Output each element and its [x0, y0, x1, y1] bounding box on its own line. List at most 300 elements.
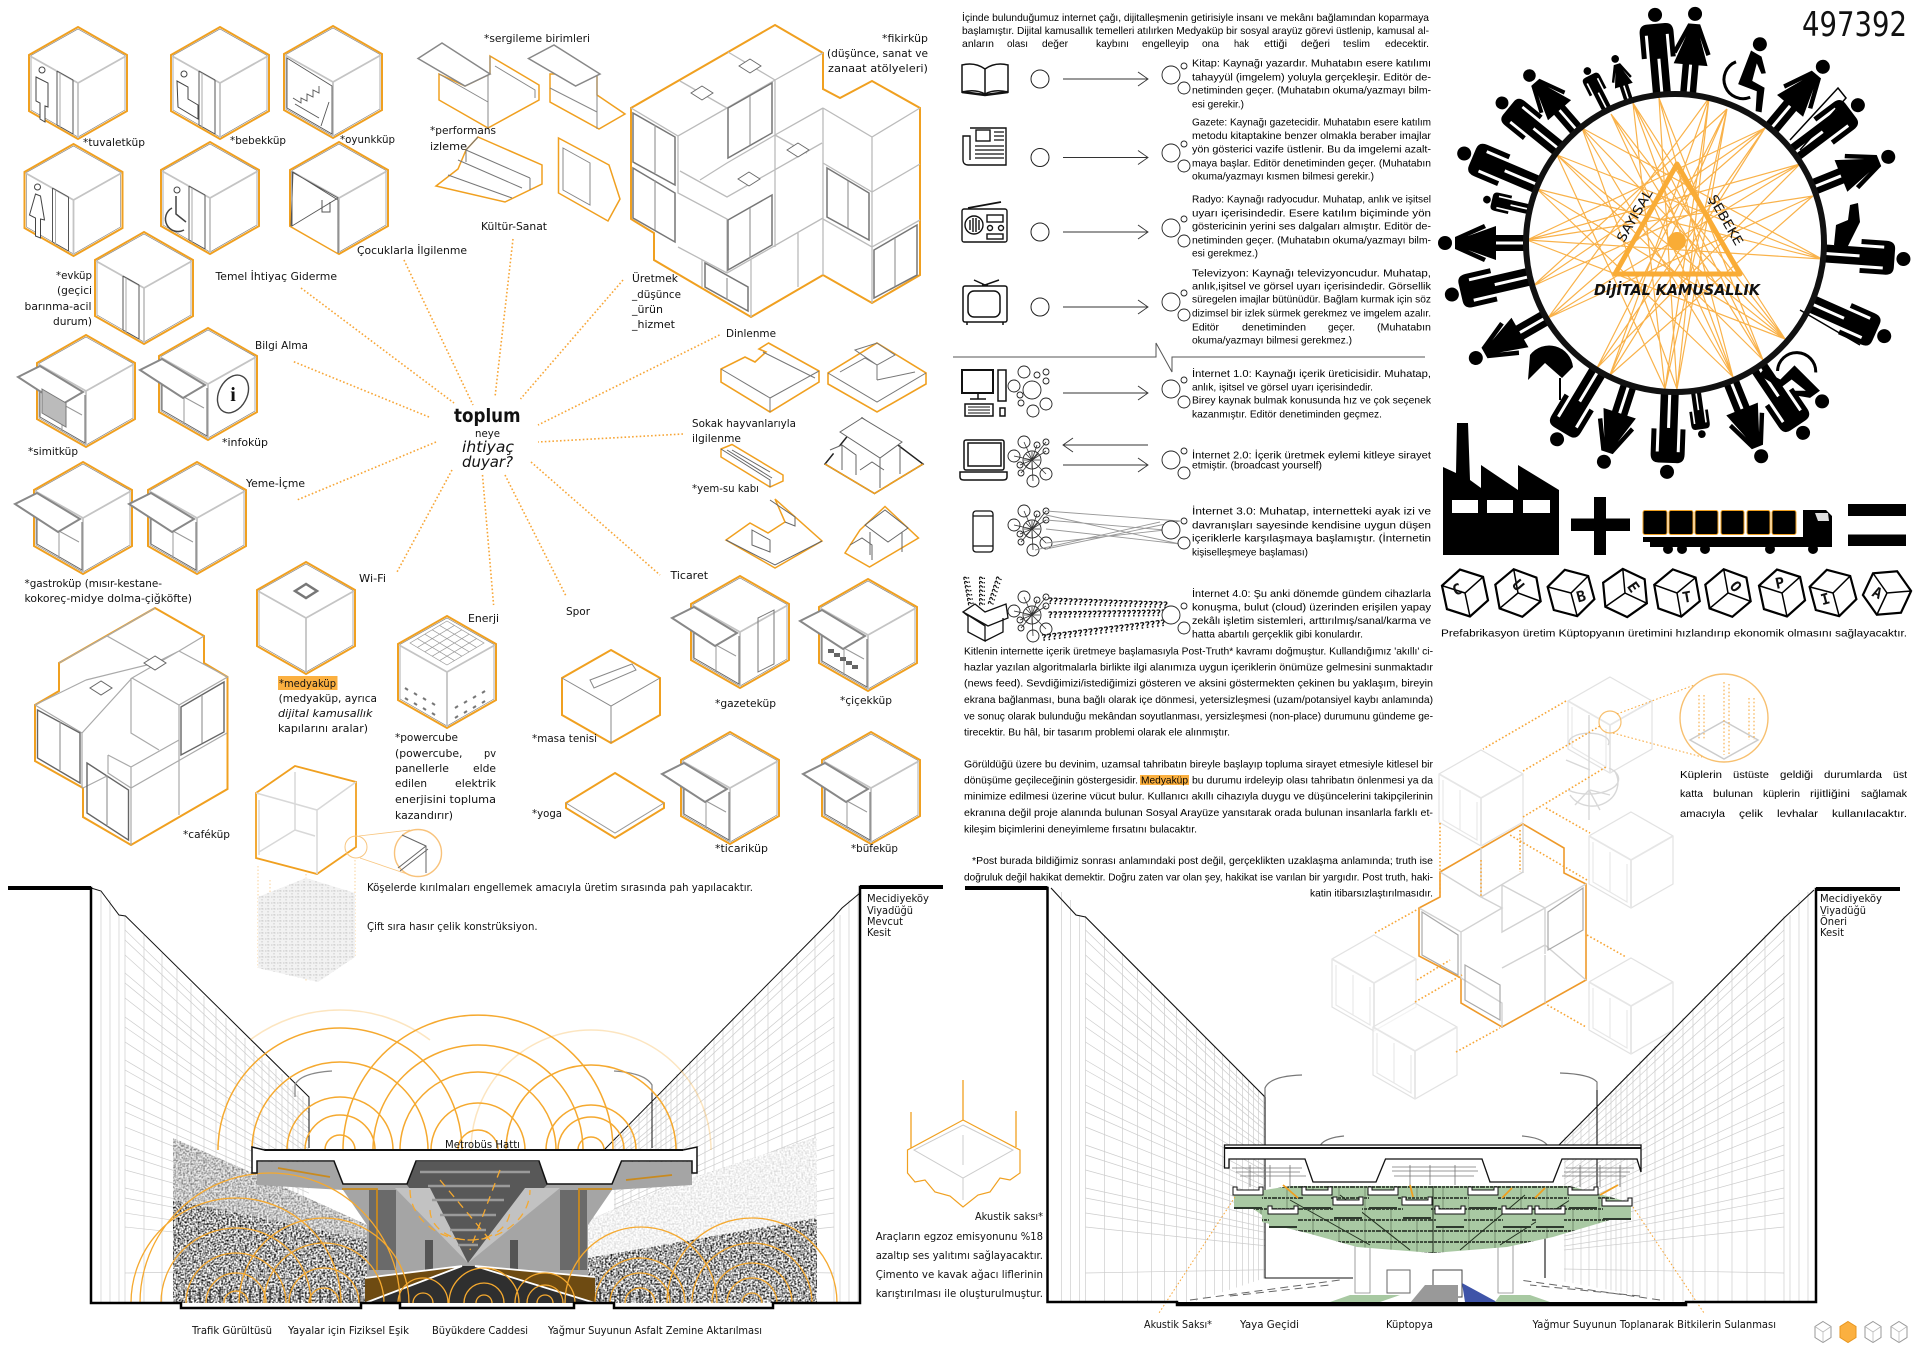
label: [692, 417, 796, 445]
icon: plus: [1571, 497, 1630, 555]
row: television flow: [1031, 290, 1190, 321]
icon: infoküp: [140, 328, 257, 440]
label: *fikirküp: [882, 32, 928, 45]
labels: section 1 captions: Yağmur Suyunun Asfalt Zemine Aktarılması: [547, 1324, 762, 1337]
text block: intro: edecektir.: [1385, 38, 1429, 50]
hanging cables and lattice: [1232, 1165, 1634, 1187]
text: Kitap: esi gerekir.): [1192, 98, 1244, 110]
text: Televizyon: okuma/yazmayı bilmesi gerekmez.): [1192, 334, 1352, 346]
icon: infoküp: i: [230, 384, 236, 406]
label: section title: Mevcut: [867, 915, 904, 928]
columns and kiosk: [1190, 1235, 1660, 1303]
text block: intro: olası: [1007, 38, 1028, 50]
heading: CUBETOPIA letter cubes: I: [1819, 589, 1832, 609]
spiral stair: [1566, 715, 1619, 820]
text block: steel plates note: üst: [1893, 769, 1907, 781]
orange assembled cubes: [1419, 824, 1586, 1027]
street lamps: [295, 1071, 652, 1097]
text: Kitap: Kitap: Kaynağı yazardır. Muhatabın esere katılımı: [1192, 58, 1431, 70]
icon: sergileme units: [418, 43, 625, 129]
label: medyaküp description: dijital kamusallık: [278, 707, 373, 720]
text block: acoustic planter: Araçların egzoz emisyonunu %18: [876, 1230, 1043, 1243]
text: Radyo: uyarı içerisindedir. Esere katılım biçiminde yön: [1192, 208, 1431, 220]
chart: orange network web: [1527, 98, 1822, 389]
text block: footnote: *Post burada bildiğimiz sonrası anlamındaki post değil, gerçeklikten uzaklaşma anlamında; truth ise: [972, 855, 1433, 867]
building outline: [91, 888, 860, 1150]
label: [430, 124, 496, 153]
text: Televizyon: (Muhatabın: [1377, 322, 1431, 334]
heading: CUBETOPIA letter cubes: U: [1508, 576, 1528, 594]
row: internet 2.0 flow: [1063, 438, 1190, 479]
text: İnternet 4.0: hatta abartılı gerçeklik gibi konulardır.: [1192, 628, 1363, 640]
labels: section 2 captions: Akustik Saksı*: [1144, 1318, 1212, 1331]
heading: toplum neye ihtiyaç duyar?: [454, 405, 520, 471]
label: *çiçekküp: [840, 694, 892, 707]
text block: steel plates note: üstüste: [1733, 769, 1769, 781]
text block: intro: değeri: [1301, 38, 1330, 50]
label: *büfeküp: [851, 842, 898, 855]
label: Çocuklarla İlgilenme: [357, 244, 467, 257]
text: İnternet 3.0: içeriklerle karşılaşmaya başlamıştır. (İnternetin: [1192, 532, 1431, 544]
label: Enerji: [468, 612, 499, 625]
icon: evküp: [95, 232, 193, 344]
text block: post-truth: (news feed). Sevdiğimizi/istediğimizi gösteren ve aksini göstermekten çekinen bu yaklaşım, bireyin: [964, 678, 1433, 690]
text block: acoustic planter: azaltıp ses yalıtımı sağlayacaktır.: [876, 1249, 1043, 1262]
text: İnternet 1.0: [1192, 367, 1432, 420]
text: Gazete: Gazete: Kaynağı gazetecidir. Muhatabın esere katılım: [1192, 116, 1431, 128]
text: Kitap: [1192, 58, 1432, 110]
heading: toplum neye ihtiyaç duyar?: ihtiyaç: [462, 438, 515, 456]
text block: medyaküp: Medyaküp: [1141, 774, 1188, 786]
labels: section 2 captions: [1144, 1318, 1776, 1331]
text block: intro: [962, 11, 1429, 50]
label: Köşelerde kırılmaları engellemek amacıyla üretim sırasında pah yapılacaktır.: [367, 881, 753, 894]
text: Radyo: netiminden geçer. (Muhatabın okuma/yazmayı bilm-: [1192, 234, 1431, 246]
ring: [1526, 94, 1824, 392]
text: İnternet 1.0: anlık, işitsel ve görsel uyarı içerisindedir.: [1192, 382, 1373, 394]
arrows: dashed planter callouts: [1159, 1197, 1704, 1313]
icon: connected network: [1008, 436, 1052, 487]
heading: CUBETOPIA letter cubes: O: [1726, 577, 1745, 596]
text: Radyo: Radyo: Kaynağı radyocudur. Muhatap, anlık ve işitsel: [1192, 194, 1431, 206]
text block: post-truth: hazlar yazılan algoritmalarla birlikte ilgi alanımıza uygun içeriklerin önümüze gelmesini sunmaktadır: [964, 662, 1434, 674]
text: Gazete: yön gösterici vazife üstlenir. Bu da imgelemi azalt-: [1192, 144, 1432, 156]
label: *infoküp: [222, 436, 268, 449]
row: book flow: [1031, 63, 1190, 94]
label: Sokak hayvanlarıyla: [692, 417, 796, 430]
street lamps: [1265, 1073, 1597, 1148]
label: evküp: barınma-acil: [24, 300, 92, 313]
text: İnternet 1.0: Birey kaynak bulmak konusunda hız ve çok seçenek: [1192, 394, 1432, 406]
icon: orange triangle: [1615, 164, 1740, 274]
row: internet 3.0 converging lines: [1035, 511, 1190, 550]
icon: tuvaletküp male: [29, 27, 127, 139]
label: Yeme-İçme: [245, 477, 305, 490]
text block: footnote: katin itibarsızlaştırılmasıdır.: [1310, 888, 1433, 900]
label: evküp: durum): [53, 315, 92, 328]
label: evküp: *evküp: [56, 269, 92, 282]
icon: radio: [962, 202, 1007, 242]
label: [631, 272, 681, 331]
text: İnternet 2.0: etmiştir. (broadcast yourself): [1192, 460, 1322, 472]
label: section title: [1820, 892, 1882, 939]
label: powercube description: elektrik: [455, 777, 497, 790]
labels: section 2 captions: Yaya Geçidi: [1239, 1318, 1299, 1331]
facades: [101, 892, 858, 1303]
label: powercube description: *powercube: [395, 731, 458, 744]
text: İnternet 4.0: zekâlı işletim sistemleri, arttırılmış/sanal/karma ve: [1192, 615, 1431, 627]
text block: steel plates note: rijitliğini: [1810, 788, 1850, 800]
text block: medyaküp: ekranına değil proje alanında bulunan Sosyal Arayüze yansıtarak orada bulunan insanlarla farklı et-: [964, 807, 1433, 819]
labels: section 2 captions: Küptopya: [1386, 1318, 1433, 1331]
labels: section 1 captions: Yayalar için Fiziksel Eşik: [287, 1324, 410, 1337]
icon: fikirküp: [631, 25, 920, 317]
icon: powercube: [398, 616, 496, 728]
facades: [1062, 892, 1808, 1303]
text block: intro: kaybını: [1096, 38, 1129, 50]
label: *tuvaletküp: [83, 136, 145, 149]
label: section title: Mecidiyeköy: [1820, 892, 1882, 905]
label: evküp: [24, 269, 92, 328]
icon: caféküp: [35, 608, 228, 845]
label: Ticaret: [670, 569, 709, 582]
text: Televizyon: anlık,işitsel ve görsel uyarı içerisindedir. Görsellik: [1192, 280, 1432, 292]
diagram: digital publicness ring with people: [1438, 5, 1912, 479]
icon: yem-su kabı: [721, 444, 783, 487]
label: section title: Kesit: [867, 926, 892, 939]
text block: steel plates note: geldiği: [1780, 769, 1813, 781]
labels: section 1 captions: Büyükdere Caddesi: [432, 1324, 528, 1337]
text: İnternet 4.0: [1192, 587, 1432, 640]
text block: steel plates note: sağlamak: [1861, 788, 1908, 800]
text block: intro: ona: [1202, 38, 1219, 50]
label: Dinlenme: [726, 327, 776, 340]
label: *sergileme birimleri: [484, 32, 590, 45]
icon: female toilet cube: [24, 144, 122, 256]
icon: bleachers: [436, 137, 542, 202]
text: İnternet 3.0: [1192, 504, 1431, 558]
label: gastroküp: [24, 577, 192, 605]
icon: network with question marks: ????????????????????????: [1048, 609, 1166, 621]
icon: open box with question marks: ???????: [986, 575, 1004, 607]
icon: masa tenisi table: [562, 650, 660, 743]
icon: television: [963, 280, 1007, 325]
text: Televizyon: [1192, 268, 1432, 346]
text block: steel plates note: amacıyla: [1680, 808, 1725, 820]
heading: toplum neye ihtiyaç duyar?: neye: [475, 427, 500, 440]
panel: cube catalogue: [15, 25, 928, 983]
heading: CUBETOPIA letter cubes: T: [1681, 588, 1693, 607]
chart: sound wave arcs at street: [131, 1170, 837, 1303]
label: evküp: (geçici: [57, 284, 92, 297]
label: medyaküp description: [278, 676, 377, 735]
text: Radyo: [1192, 194, 1432, 260]
text block: intro: başlamıştır. Dijital kamusallık temelleri atılırken Medyaküp bir sosyal arayüz görevi üstlenip, kamusal al-: [962, 25, 1429, 37]
label: Kültür-Sanat: [481, 220, 548, 233]
icon: yoga plate: [566, 773, 664, 838]
label: powercube description: enerjisini topluma: [395, 793, 496, 806]
icon: oyunkküp stairs: [284, 26, 382, 138]
heading: CUBETOPIA letter cubes: [1439, 561, 1916, 625]
text: Kitap: netiminden geçer. (Muhatabın okuma/yazmayı bilm-: [1192, 84, 1431, 96]
text block: acoustic planter: Çimento ve kavak ağacı liflerinin: [876, 1268, 1043, 1281]
icon: simitküp: [18, 335, 135, 447]
faded cubes: [1332, 677, 1673, 1099]
label: *yoga: [532, 807, 562, 820]
icon: büfeküp: [803, 732, 920, 844]
labels: section 1 captions: [191, 1324, 762, 1337]
text block: intro: anların: [962, 38, 994, 50]
icon: pet shelter: [825, 418, 923, 494]
label: section title: Viyadüğü: [1820, 904, 1866, 917]
label: Metrobüs Hattı: [445, 1138, 520, 1151]
icon: open child cube: [290, 142, 388, 254]
label: gastroküp: kokoreç-midye dolma-çiğköfte): [24, 592, 192, 605]
icon: smartphone: [973, 511, 993, 552]
text block: intro: hak: [1234, 38, 1250, 50]
text: İnternet 3.0: davranışları sayesinde kendisine uygun düşen: [1192, 520, 1431, 532]
orange braces: [1283, 1185, 1618, 1198]
text: Gazete: metodu kitaptakine benzer olmakla beraber imajlar: [1192, 130, 1431, 142]
text block: post-truth: ve sonuç olarak bulunduğu mekândan soyutlanması, yersizleşmesi (non-place) durumunu gündeme ge-: [964, 710, 1433, 722]
text: Televizyon: denetiminden: [1242, 322, 1306, 334]
label: ŞEBEKE: ŞEBEKE: [1705, 192, 1746, 248]
icon: structural cube: [256, 766, 356, 874]
text block: medyaküp: Görüldüğü üzere bu devinim, uzamsal tahribatın bireyle başlayıp topluma sirayet etmesiyle kitlesel bir: [964, 758, 1433, 770]
text: İnternet 4.0: konuşma, bulut (cloud) üzerinden erişilen yapay: [1192, 602, 1432, 614]
text: Televizyon: geçer.: [1328, 322, 1355, 334]
label: powercube description: edilen: [395, 777, 427, 790]
label: _düşünce: [631, 288, 681, 301]
arrows: dotted spokes from toplum: [292, 239, 720, 605]
heading: CUBETOPIA letter cubes: E: [1623, 578, 1643, 596]
icon: gastroküp 1: [15, 462, 132, 574]
icon: equals: [1848, 504, 1906, 546]
text block: post-truth: ekrana bağlanması, buna bağlı olarak içe dönmesi, yetersizleşmesi (uzam/potansiyel kaybı anlamında): [964, 694, 1433, 706]
icon: gastroküp 2: [129, 462, 246, 574]
text: İnternet 4.0: İnternet 4.0: Şu anki dönemde gündem cihazlarla: [1192, 587, 1431, 600]
icon: open box with question marks: ???????: [978, 576, 987, 606]
labels: section 1 captions: Trafik Gürültüsü: [191, 1324, 272, 1337]
label: section title: Kesit: [1820, 926, 1845, 939]
label: powercube description: kazandırır): [395, 809, 453, 822]
text block: post-truth: Kitlenin internette içerik üretmeye başlamasıyla Post-Truth* kavramı doğmuştur. Kullandığımız 'akıllı' ci-: [964, 646, 1433, 658]
label: section title: Viyadüğü: [867, 904, 913, 917]
label: *performans: [430, 124, 496, 137]
label: *caféküp: [183, 828, 230, 841]
icon: corner magnifier: [345, 830, 442, 876]
text block: medyaküp: minimize edilmesi üzerine vücut bulur. Kullanıcı akıllı cihazıyla duygu ve düşüncelerini takipçilerinin: [964, 790, 1433, 802]
label: zanaat atölyeleri): [828, 62, 928, 75]
icon: desktop computer: [962, 370, 1006, 416]
white road level: [1190, 1200, 1680, 1303]
icon: truck with cubes: [1643, 510, 1832, 554]
icon: ticariküp: [662, 732, 779, 844]
text: İnternet 2.0: İnternet 2.0: İçerik üretmek eylemi kitleye sirayet: [1192, 448, 1431, 462]
label: medyaküp description: *medyaküp: [279, 677, 336, 690]
icon: accessible toilet cube: [161, 142, 259, 254]
text block: steel plates note: kullanılacaktır.: [1832, 808, 1907, 820]
icon: çiçekküp: [800, 579, 917, 691]
text: Kitap: tahayyül (imgelem) yoluyla gerçekleşir. Editör de-: [1192, 72, 1432, 84]
diagram: exploded cube assembly: [1332, 674, 1768, 1099]
icon: acoustic planter: [908, 1080, 1020, 1207]
icon: laptop: [960, 440, 1007, 480]
label: SAYISAL: SAYISAL: [1614, 187, 1657, 245]
label: powercube description: elde: [473, 762, 496, 775]
text: Televizyon: dizimsel bir izlek sürmek gerekmez ve imgelem azalır.: [1192, 308, 1431, 320]
text: Televizyon: Editör: [1192, 322, 1219, 334]
label: section title: Öneri: [1820, 915, 1847, 928]
text block: footnote: [964, 855, 1433, 900]
label: section title: Mecidiyeköy: [867, 892, 929, 905]
caption: prefabrication: Prefabrikasyon üretim Küptopyanın üretimini hızlandırıp ekonomik olmasını sağlayacaktır.: [1441, 628, 1907, 640]
icon: steel mesh cube: [256, 860, 357, 983]
text: Radyo: esi gerekmez.): [1192, 248, 1258, 260]
icon: bebekküp: [171, 27, 269, 139]
label: DİJİTAL KAMUSALLIK: DİJİTAL KAMUSALLIK: [1594, 280, 1761, 299]
labels: section 2 captions: Yağmur Suyunun Toplanarak Bitkilerin Sulanması: [1532, 1318, 1776, 1331]
label: *oyunkküp: [340, 133, 395, 146]
text: Gazete: okuma/yazmayı kısmen bilmesi gerekir.): [1192, 170, 1374, 182]
label: *masa tenisi: [532, 732, 597, 745]
panel: proposed section: [965, 888, 1900, 1331]
text: Televizyon: Televizyon: Kaynağı televizyoncudur. Muhatap,: [1192, 268, 1431, 280]
icon: factory: [1443, 423, 1559, 555]
text block: medyaküp: [964, 758, 1433, 836]
label: medyaküp description: kapılarını aralar): [278, 722, 368, 735]
text: Gazete: [1192, 116, 1432, 182]
label: medyaküp description: (medyaküp, ayrıca: [279, 692, 377, 705]
text block: acoustic planter: karıştırılması ile oluşturulmuştur.: [876, 1287, 1043, 1300]
text block: steel plates note: [1680, 769, 1908, 820]
icon: newspaper: [963, 128, 1006, 165]
text block: acoustic planter: Akustik saksı*: [975, 1210, 1043, 1223]
row: newspaper flow: [1031, 141, 1190, 172]
text block: post-truth: tirecektir. Bu hâl, bir tasarım problemi olarak ele alınmıştır.: [964, 726, 1230, 738]
label: (düşünce, sanat ve: [827, 47, 928, 60]
heading: toplum neye ihtiyaç duyar?: toplum: [454, 405, 520, 427]
text block: steel plates note: çelik: [1739, 808, 1764, 820]
icon: dinlenme bench: [721, 343, 819, 412]
text block: intro: teslim: [1343, 38, 1370, 50]
text block: steel plates note: levhalar: [1777, 808, 1819, 820]
building outline: [1051, 888, 1814, 1278]
label: Wi-Fi: [359, 572, 386, 585]
label: ilgilenme: [692, 432, 741, 445]
text: İnternet 3.0: İnternet 3.0: Muhatap, internetteki ayak izi ve: [1192, 504, 1431, 518]
text block: intro: ettiği: [1264, 38, 1287, 50]
text block: post-truth: [964, 646, 1434, 738]
text block: footnote: doğruluk değil hakikat demektir. Doğru zaten var olan şey, hakikat ise varılan bir yargıdır. Post truth, haki-: [964, 872, 1433, 884]
text block: steel plates note: katta: [1680, 788, 1703, 800]
icon: bench set: [845, 506, 918, 567]
label: Spor: [566, 605, 590, 618]
label: powercube description: [395, 731, 497, 822]
text block: acoustic planter: [876, 1210, 1043, 1300]
icon: network with question marks: ????????????????????????: [1048, 597, 1168, 611]
text: İnternet 1.0: İnternet 1.0: Kaynağı içerik üreticisidir. Muhatap,: [1192, 367, 1431, 380]
text block: steel plates note: durumlarda: [1824, 769, 1882, 781]
frame: ground section line: [965, 888, 1900, 1305]
viaduct deck: [1224, 1145, 1641, 1182]
heading: CUBETOPIA letter cubes: P: [1774, 573, 1786, 593]
label: *yem-su kabı: [692, 482, 759, 495]
icon: open box with question marks: [962, 575, 1008, 641]
label: section title: [867, 892, 929, 939]
label: izleme: [430, 140, 467, 153]
label: _hizmet: [631, 318, 676, 331]
label: *gazeteküp: [715, 697, 776, 710]
text block: steel plates note: küplerin: [1763, 788, 1800, 800]
label: Üretmek: [632, 272, 679, 285]
label: *ticariküp: [715, 842, 768, 855]
label: Temel İhtiyaç Giderme: [215, 270, 337, 283]
icon: exhibit panel: [558, 138, 620, 221]
label: Bilgi Alma: [255, 339, 308, 352]
icon: gazeteküp: [672, 576, 789, 688]
heading: toplum neye ihtiyaç duyar?: duyar?: [462, 453, 513, 471]
text block: medyaküp: bu durumu irdeleyip olası tahribatın önlenmesi ya da: [1192, 774, 1433, 786]
text block: steel plates note: bulunan: [1713, 788, 1753, 800]
text: İnternet 1.0: kazanmıştır. Editör denetiminden geçmez.: [1192, 408, 1382, 420]
heading: CUBETOPIA letter cubes: A: [1869, 583, 1885, 603]
label: [827, 32, 928, 75]
icon: personalised network: [1008, 505, 1052, 556]
arrows: dotted assembly guides: [1375, 701, 1626, 1052]
label: powercube description: pv: [484, 747, 496, 760]
text block: intro: İçinde bulunduğumuz internet çağı, dijitalleşmenin getirisiyle insanı ve mekânı bağlamından koparmaya: [962, 11, 1429, 24]
chart: sound wave arcs above viaduct: [218, 1010, 711, 1150]
label: gastroküp: *gastroküp (mısır-kestane-: [24, 577, 162, 590]
icon: medyaküp: [257, 562, 355, 674]
text: Radyo: göstericinin yerini ses dalgaları almıştır. Editör de-: [1192, 220, 1432, 232]
text block: medyaküp: dönüşüme geçileceğinin göstergesidir.: [964, 774, 1138, 786]
frame: ground section line: [8, 887, 943, 1308]
text block: intro: değer: [1042, 38, 1068, 50]
icon: network: [1008, 366, 1052, 417]
icon: book: [962, 64, 1008, 95]
label: Çift sıra hasır çelik konstrüksiyon.: [367, 920, 538, 933]
text block: steel plates note: Küplerin: [1680, 769, 1722, 781]
label: powercube description: (powercube,: [395, 747, 462, 760]
label: *simitküp: [28, 445, 78, 458]
text block: intro: engelleyip: [1142, 38, 1189, 50]
text block: medyaküp: kileşim biçimlerini deneyimleme fırsatını bulacaktır.: [964, 824, 1197, 836]
label: *bebekküp: [230, 134, 286, 147]
legend: cube sequence: [1815, 1322, 1907, 1342]
text: İnternet 2.0: [1192, 448, 1431, 472]
photo: under viaduct street: [173, 1137, 817, 1303]
icon: open box with question marks: ???????: [962, 575, 976, 606]
icon: people around ring: [1438, 5, 1912, 479]
divider: broken line: [953, 343, 1425, 372]
text: Gazete: maya başlar. Editör denetiminden geçer. (Muhatabın: [1192, 158, 1431, 170]
heading: CUBETOPIA letter cubes: C: [1450, 580, 1465, 600]
detail: steel plate magnifier: [1599, 674, 1768, 762]
text: Televizyon: süregelen imajlar bütünüdür. Bağlam kurmak için söz: [1192, 294, 1431, 306]
row: radio flow: [1031, 216, 1190, 247]
icon: ground plate with bench: [726, 499, 822, 568]
row: internet 1.0 flow: [1063, 377, 1190, 408]
icon: dinlenme seat: [828, 343, 926, 412]
icon: network with question marks: [1008, 591, 1190, 644]
icon: network with question marks: ????????????????????????: [1041, 619, 1166, 644]
heading: CUBETOPIA letter cubes: B: [1575, 587, 1588, 606]
text: İnternet 3.0: kişiselleşmeye başlaması): [1192, 546, 1308, 558]
panel: existing section: [8, 887, 943, 1337]
viaduct deck: [252, 1147, 697, 1184]
